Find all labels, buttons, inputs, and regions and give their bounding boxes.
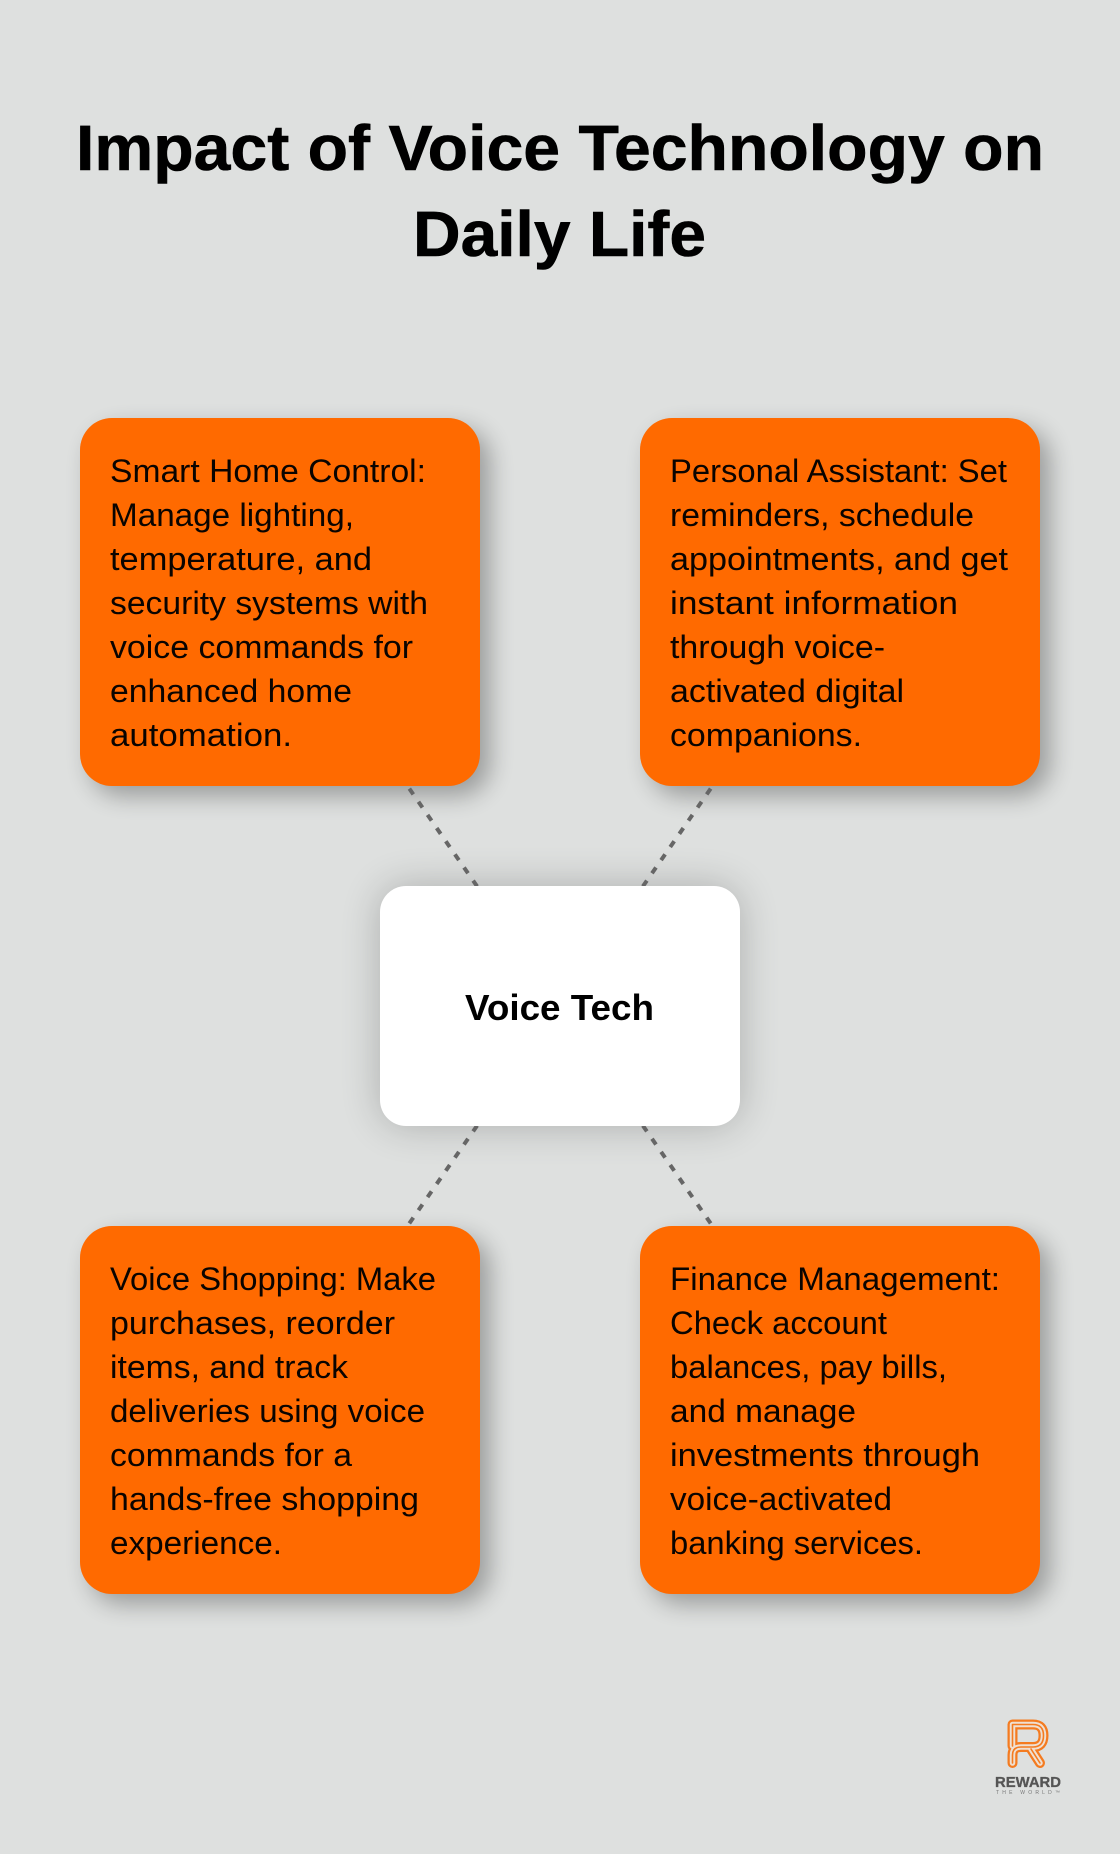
- panel: voice shopping: [80, 1226, 480, 1594]
- panel: center voice tech: Voice Tech: [465, 987, 654, 1028]
- panel: voice shopping: commands for a: [110, 1437, 352, 1473]
- panel: finance management: balances, pay bills,: [670, 1349, 947, 1385]
- connector: smart home to center: [280, 602, 560, 1006]
- panel: center voice tech: [380, 886, 740, 1126]
- panel: voice shopping: purchases, reorder: [110, 1305, 395, 1341]
- logo: reward the world: REWARD: [995, 1774, 1061, 1791]
- panel: finance management: Check account: [670, 1305, 887, 1341]
- panel: personal assistant: activated digital: [670, 673, 904, 709]
- panel: finance management: [640, 1226, 1040, 1594]
- panel: personal assistant: reminders, schedule: [670, 497, 974, 533]
- title: [76, 112, 1044, 270]
- panel: smart home control: Smart Home Control:: [110, 453, 426, 489]
- panel: smart home control: temperature, and: [110, 541, 372, 577]
- panel: smart home control: automation.: [110, 717, 292, 753]
- icon: R mark: [1012, 1724, 1044, 1763]
- panel: smart home control: [80, 418, 480, 786]
- panel: smart home control: security systems with: [110, 585, 428, 621]
- panel: personal assistant: appointments, and get: [670, 541, 1008, 577]
- panel: smart home control: voice commands for: [110, 629, 413, 665]
- panel: personal assistant: Personal Assistant: Set: [670, 453, 1007, 489]
- title: Impact of Voice Technology on: [76, 112, 1044, 184]
- panel: personal assistant: instant information: [670, 585, 958, 621]
- panel: personal assistant: through voice-: [670, 629, 885, 665]
- panel: personal assistant: companions.: [670, 717, 862, 753]
- panel: personal assistant: [640, 418, 1040, 786]
- connector: finance management to center: [560, 1006, 840, 1410]
- connector: voice shopping to center: [280, 1006, 560, 1410]
- panel: finance management: Finance Management:: [670, 1261, 1000, 1297]
- panel: smart home control: Manage lighting,: [110, 497, 354, 533]
- panel: finance management: voice-activated: [670, 1481, 892, 1517]
- panel: finance management: banking services.: [670, 1525, 923, 1561]
- panel: voice shopping: hands-free shopping: [110, 1481, 419, 1517]
- panel: voice shopping: experience.: [110, 1525, 282, 1561]
- connector: personal assistant to center: [560, 602, 840, 1006]
- logo: reward the world: THE WORLD™: [996, 1790, 1060, 1796]
- panel: finance management: investments through: [670, 1437, 980, 1473]
- panel: smart home control: enhanced home: [110, 673, 352, 709]
- logo: reward the world: [995, 1724, 1061, 1796]
- panel: voice shopping: items, and track: [110, 1349, 349, 1385]
- panel: finance management: and manage: [670, 1393, 856, 1429]
- panel: voice shopping: deliveries using voice: [110, 1393, 425, 1429]
- title: Daily Life: [413, 198, 706, 270]
- panel: voice shopping: Voice Shopping: Make: [110, 1261, 436, 1297]
